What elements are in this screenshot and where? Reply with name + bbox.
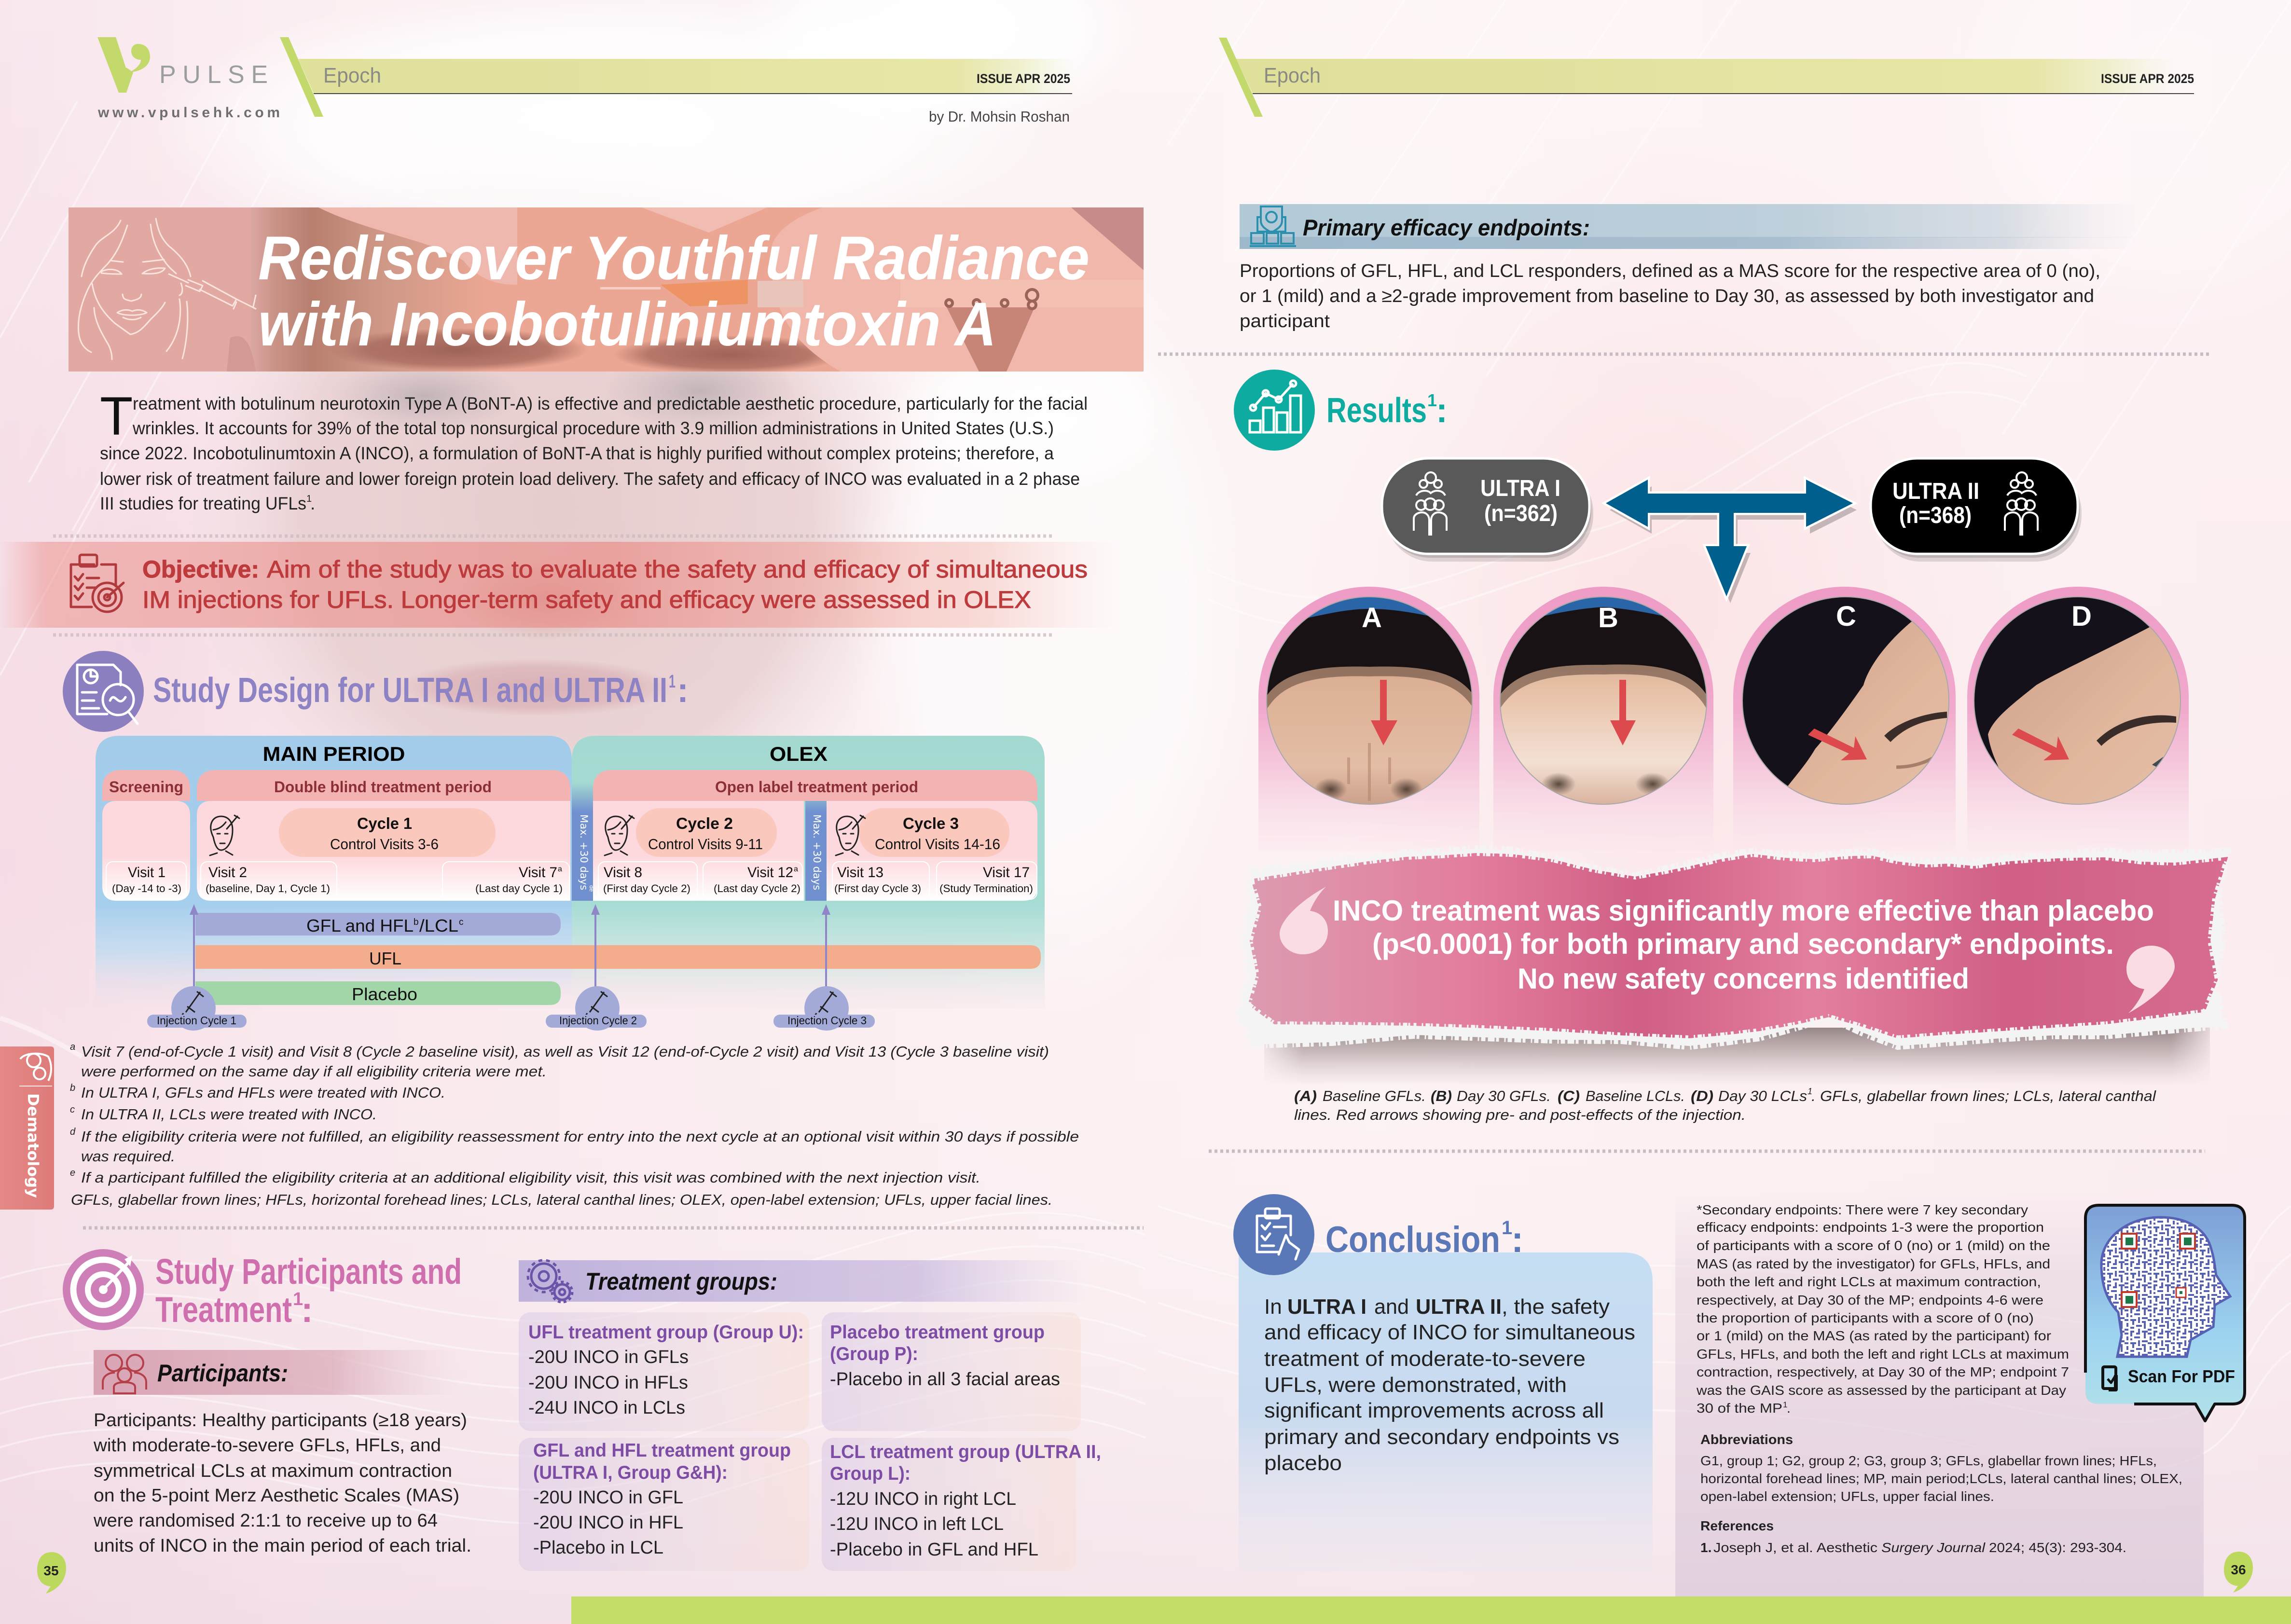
icons: faces with syringe — [605, 815, 865, 855]
title banner — [69, 207, 1144, 374]
author byline: by Dr. Mohsin Roshan — [929, 108, 1070, 125]
text: references — [1700, 1518, 2126, 1555]
header: right page Epoch band: Epoch — [1264, 64, 1321, 87]
icon: target — [73, 1255, 133, 1320]
panel: conclusion: primary and secondary endpoints vs — [1264, 1425, 1619, 1449]
photo panel B — [1493, 587, 1713, 852]
heading: study participants and treatment: 1 — [293, 1289, 303, 1309]
divider dots — [1158, 352, 2209, 356]
photo caption: (C) — [1558, 1087, 1580, 1104]
text: secondary endpoints: MAS (as rated by the investigator) for GFLs, HFLs, and — [1697, 1256, 2050, 1271]
panel: open label treatment period: Control Visits 14-16 — [875, 836, 1000, 853]
bar: GFL and HFL: GFL and HFL — [306, 916, 414, 936]
panel: double blind treatment period: (Last day Cycle 1) — [475, 882, 563, 895]
panel: GFL and HFL treatment group: -Placebo in LCL — [533, 1538, 663, 1558]
panel: open label treatment period: Cycle 3 — [903, 814, 959, 832]
panel: double blind treatment period: (baseline, Day 1, Cycle 1) — [206, 882, 330, 895]
heading: results: Results — [1326, 391, 1427, 430]
panel: double blind treatment period: Visit 2 — [208, 865, 247, 881]
icon: bar chart with trend line — [1250, 381, 1301, 432]
text: participants: Participants: Healthy participants (≥18 years) — [94, 1410, 467, 1431]
page number 36 — [2224, 1552, 2253, 1593]
panel: UFL treatment group: UFL treatment group (Group U): — [528, 1322, 804, 1343]
panel: LCL treatment group: Group L): — [830, 1463, 911, 1484]
badge: ULTRA I — [1382, 458, 1593, 562]
text: abbreviations: G1, group 1; G2, group 2; G3, group 3; GFLs, glabellar frown lines; HFLs, — [1700, 1453, 2157, 1468]
section band: primary efficacy endpoints: Primary efficacy endpoints: — [1303, 215, 1590, 240]
panel: open label treatment period: (First day Cycle 3) — [834, 882, 921, 895]
torn paper: white edge — [1239, 849, 2227, 1046]
bar: GFL and HFL: c — [459, 917, 463, 927]
footnotes: If the eligibility criteria were not fulfilled, an eligibility reassessment for entry into the next cycle at an optional visit within 30 days if possible — [81, 1128, 1079, 1145]
background photo: ghosted face with cap and gloves — [145, 0, 1259, 1023]
divider dots — [1209, 1149, 2205, 1153]
panel: conclusion — [1233, 1194, 1653, 1571]
photo caption: 1 — [1808, 1087, 1812, 1096]
intro paragraph: since 2022. Incobotulinumtoxin A (INCO), a formulation of BoNT-A that is highly purified without complex proteins; therefore, a — [100, 443, 1054, 463]
photo caption: lines. Red arrows showing pre- and post-effects of the injection. — [1294, 1106, 1746, 1123]
footnotes: In ULTRA I, GFLs and HFLs were treated with INCO. — [81, 1084, 445, 1101]
footnotes: d — [70, 1127, 76, 1137]
heading: study participants and treatment: Treatment — [155, 1290, 292, 1330]
text: primary endpoints: Proportions of GFL, HFL, and LCL responders, defined as a MAS score for the respective area of 0 (no), — [1240, 261, 2100, 281]
badge: ULTRA II: (n=368) — [1899, 503, 1972, 528]
marker: injection cycle 1 — [147, 986, 247, 1031]
heading: study participants and treatment: : — [301, 1290, 313, 1330]
header: left page Epoch band — [280, 37, 1076, 117]
text: secondary endpoints: of participants with a score of 0 (no) or 1 (mild) on the — [1697, 1238, 2050, 1253]
panel: GFL and HFL treatment group: GFL and HFL treatment group — [533, 1440, 791, 1461]
panel: UFL treatment group — [519, 1312, 809, 1431]
heading: results: 1 — [1427, 390, 1437, 410]
intro paragraph: . — [310, 494, 315, 513]
panel: open label treatment period: Open label treatment period — [715, 778, 918, 796]
badge: ULTRA I: ULTRA I — [1480, 476, 1560, 501]
heading: study design — [63, 651, 689, 732]
photo caption: Day 30 LCLs — [1718, 1087, 1807, 1104]
panel: conclusion: treatment of moderate-to-severe — [1264, 1347, 1586, 1371]
section band: treatment groups — [519, 1260, 1088, 1302]
callout: torn paper key message: No new safety concerns identified — [1518, 963, 1969, 995]
panel: conclusion: : — [1511, 1219, 1523, 1260]
callout: torn paper key message: INCO treatment was significantly more effective than placebo — [1333, 895, 2154, 927]
page number 36: 36 — [2231, 1562, 2246, 1577]
objective band: Aim of the study was to evaluate the safety and efficacy of simultaneous — [267, 556, 1088, 583]
icon: line face with syringe — [78, 219, 256, 359]
text: secondary endpoints: efficacy endpoints: endpoints 1-3 were the proportion — [1697, 1220, 2044, 1235]
text: secondary endpoints: contraction, respectively, at Day 30 of the MP; endpoint 7 — [1697, 1364, 2069, 1379]
icon: gears — [528, 1260, 572, 1302]
panel: conclusion: , the safety — [1502, 1295, 1610, 1319]
intro paragraph: reatment with botulinum neurotoxin Type A (BoNT-A) is effective and predictable aesthetic procedure, particularly for the facial — [133, 394, 1088, 413]
header: left page Epoch band: ISSUE APR 2025 — [977, 71, 1070, 86]
text: secondary endpoints — [1696, 1202, 2069, 1416]
callout: torn paper key message — [1239, 849, 2227, 1086]
marker: injection cycle 1: Injection Cycle 1 — [157, 1014, 236, 1027]
panel: LCL treatment group: -Placebo in GFL and HFL — [830, 1540, 1038, 1560]
logo: V Pulse: www.vpulsehk.com — [97, 105, 280, 121]
bar: UFL — [195, 945, 1041, 969]
badge: ULTRA II — [1871, 458, 2082, 562]
bar: placebo: Placebo — [352, 984, 417, 1004]
panel: open label treatment period: Visit 12 — [747, 865, 793, 881]
text: secondary endpoints: 30 of the MP — [1697, 1401, 1782, 1416]
text: participants: with moderate-to-severe GFLs, HFLs, and — [93, 1435, 441, 1456]
photo panel D — [1967, 587, 2189, 852]
spacer strips: max +30 days — [572, 783, 827, 901]
text: references: 1. — [1700, 1540, 1711, 1555]
heading: study design: Study Design for ULTRA I and ULTRA II — [153, 671, 667, 710]
chart: study timeline — [96, 736, 1045, 1031]
panel: LCL treatment group — [822, 1438, 1101, 1571]
marker: injection cycle 3 — [773, 986, 875, 1031]
text: secondary endpoints: GFLs, HFLs, and both the left and right LCLs at maximum — [1697, 1347, 2069, 1362]
arrows: injection cycles — [190, 904, 830, 989]
icon: phone — [2103, 1367, 2116, 1390]
panel: GFL and HFL treatment group — [519, 1438, 809, 1571]
panel: screening: Screening — [109, 778, 183, 796]
panel: open label treatment period: (Study Termination) — [939, 882, 1033, 895]
panel: placebo treatment group: Placebo treatment group — [830, 1322, 1045, 1343]
panel: double blind treatment period: Cycle 1 — [357, 814, 412, 832]
icon: face with syringe — [210, 815, 239, 855]
heading: study design: 1 — [669, 672, 676, 692]
photo panel C — [1733, 587, 1956, 852]
objective band — [0, 536, 1119, 635]
objective band: IM injections for UFLs. Longer-term safety and efficacy were assessed in OLEX — [142, 586, 1031, 613]
panel: open label treatment period: Visit 8 — [604, 865, 642, 881]
footnotes: GFLs, glabellar frown lines; HFLs, horizontal forehead lines; LCLs, lateral canthal lines; OLEX, open-label extension; UFLs, upper facial lines. — [71, 1191, 1052, 1208]
footnotes: If a participant fulfilled the eligibility criteria at an additional eligibility visit, this visit was combined with the next injection visit. — [81, 1169, 980, 1186]
torn paper: pink face — [1251, 856, 2224, 1035]
panel: UFL treatment group: -20U INCO in HFLs — [528, 1373, 688, 1393]
text: secondary endpoints: . — [1787, 1401, 1791, 1416]
panel: conclusion: placebo — [1264, 1451, 1342, 1475]
section band: participants: Participants: — [157, 1360, 288, 1387]
panel: screening — [102, 770, 190, 901]
intro paragraph — [100, 386, 1088, 513]
divider dots — [83, 1226, 1144, 1229]
page number 35 — [37, 1552, 66, 1594]
icon: closing quote — [2126, 946, 2175, 1013]
photo caption: Baseline LCLs. — [1586, 1087, 1685, 1104]
bar: GFL and HFL: /LCL — [419, 916, 458, 936]
panel: placebo treatment group: (Group P): — [830, 1344, 918, 1364]
spacer strips: max +30 days: de — [588, 885, 595, 892]
text: references: Joseph J, et al. Aesthetic — [1713, 1540, 1877, 1555]
panel: main period: MAIN PERIOD — [262, 743, 405, 765]
header: left page Epoch band: Epoch — [323, 64, 381, 87]
text: abbreviations — [1700, 1432, 2182, 1504]
text: secondary endpoints: was the GAIS score as assessed by the participant at Day — [1696, 1383, 2066, 1398]
panel: UFL treatment group: -24U INCO in LCLs — [528, 1398, 685, 1418]
panel: open label treatment period: Visit 17 — [983, 865, 1030, 881]
photo caption: (D) — [1691, 1087, 1713, 1104]
text: participants: were randomised 2:1:1 to receive up to 64 — [93, 1511, 438, 1531]
QR speech bubble: Scan For PDF — [2128, 1366, 2235, 1386]
footnotes: b — [70, 1083, 75, 1093]
header: right page Epoch band: ISSUE APR 2025 — [2101, 71, 2194, 86]
photo caption: . GFLs, glabellar frown lines; LCLs, lateral canthal — [1811, 1087, 2156, 1104]
bar: placebo — [195, 981, 561, 1005]
panel: double blind treatment period: a — [558, 865, 562, 873]
panel: open label treatment period: a — [794, 865, 798, 873]
objective band: Objective: — [142, 556, 259, 583]
marker: injection cycle 2 — [546, 986, 647, 1031]
marker: injection cycle 2: Injection Cycle 2 — [559, 1014, 637, 1027]
footnotes: was required. — [81, 1148, 175, 1165]
text: participants: on the 5-point Merz Aesthetic Scales (MAS) — [94, 1486, 459, 1506]
panel: GFL and HFL treatment group: (ULTRA I, Group G&H): — [533, 1462, 728, 1483]
intro paragraph: lower risk of treatment failure and lower foreign protein load delivery. The safety and efficacy of INCO was evaluated in a 2 phase — [100, 469, 1080, 489]
section band: treatment groups: Treatment groups: — [585, 1268, 777, 1295]
bar: GFL and HFL — [195, 913, 561, 936]
icon: checklist and target — [71, 555, 124, 612]
photo caption: Baseline GFLs. — [1323, 1087, 1426, 1104]
arrow: three-way connector — [1606, 480, 1857, 603]
text: secondary endpoints: both the left and right LCLs at maximum contraction, — [1697, 1274, 2041, 1289]
text: secondary endpoints: respectively, at Day 30 of the MP; endpoints 4-6 were — [1697, 1293, 2043, 1307]
photo caption — [1294, 1087, 2156, 1123]
panel: open label treatment period: Cycle 2 — [676, 814, 733, 832]
spacer strips: max +30 days: Max. +30 days — [811, 814, 823, 890]
panel: conclusion: Conclusion — [1325, 1219, 1500, 1260]
bottom green bar — [571, 1596, 2291, 1624]
photo panel D: D — [2071, 601, 2092, 632]
panel: LCL treatment group: LCL treatment group (ULTRA II, — [830, 1442, 1101, 1462]
marker: injection cycle 3: Injection Cycle 3 — [787, 1014, 867, 1027]
panel: conclusion: 1 — [1502, 1217, 1512, 1239]
panel: open label treatment period: Visit 13 — [837, 865, 883, 881]
icon: report with magnifier — [77, 665, 138, 724]
icon: opening quote — [1280, 887, 1328, 954]
panel: conclusion: significant improvements across all — [1264, 1399, 1604, 1422]
badge: ULTRA I: (n=362) — [1484, 501, 1558, 526]
text: secondary endpoints: *Secondary endpoints: There were 7 key secondary — [1697, 1202, 2028, 1217]
section band: primary efficacy endpoints — [1240, 204, 2142, 249]
heading: results — [1234, 370, 1448, 451]
panel: conclusion: In — [1264, 1295, 1282, 1319]
photo caption: (B) — [1431, 1087, 1452, 1104]
footnotes: a — [70, 1042, 75, 1052]
panel: screening: (Day -14 to -3) — [112, 882, 181, 895]
icon: shield over monitors — [1250, 206, 1296, 246]
panel: double blind treatment period: Double blind treatment period — [274, 778, 492, 796]
heading: study participants and treatment — [63, 1249, 462, 1330]
panel: GFL and HFL treatment group: -20U INCO in HFL — [533, 1513, 683, 1533]
panel: references background — [1675, 1192, 2204, 1596]
QR code shaped as head — [2101, 1217, 2230, 1357]
badge: ULTRA II: ULTRA II — [1892, 479, 1979, 504]
text: participants — [93, 1410, 471, 1556]
photo caption: Day 30 GFLs. — [1457, 1087, 1551, 1104]
panel: open label treatment period: (Last day Cycle 2) — [714, 882, 800, 895]
text: abbreviations: Abbreviations — [1700, 1432, 1793, 1447]
callout: torn paper key message: (p<0.0001) for both primary and secondary* endpoints. — [1372, 928, 2114, 960]
panel: placebo treatment group — [822, 1312, 1081, 1431]
title banner: with Incobotuliniumtoxin A — [258, 290, 996, 359]
text: secondary endpoints: or 1 (mild) on the MAS (as rated by the participant) for — [1697, 1328, 2051, 1343]
header: right page Epoch band — [1219, 38, 2194, 117]
logo: V Pulse: PULSE — [159, 61, 268, 89]
text: primary endpoints: or 1 (mild) and a ≥2-grade improvement from baseline to Day 30, as assessed by both investigator and — [1240, 286, 2094, 306]
page number 35: 35 — [43, 1563, 59, 1578]
panel: double blind treatment period: Visit 7 — [519, 865, 557, 881]
bar: UFL: UFL — [369, 949, 401, 968]
panel: open label treatment period: Control Visits 9-11 — [648, 836, 763, 853]
title banner: Rediscover Youthful Radiance — [258, 224, 1090, 293]
text: abbreviations: open-label extension; UFLs, upper facial lines. — [1700, 1489, 1994, 1504]
footnotes — [70, 1042, 1079, 1208]
footnotes: In ULTRA II, LCLs were treated with INCO. — [81, 1106, 377, 1123]
photo panel C: C — [1836, 601, 1856, 632]
panel: conclusion: and efficacy of INCO for simultaneous — [1264, 1321, 1635, 1344]
footnotes: were performed on the same day if all eligibility criteria were met. — [81, 1063, 547, 1080]
heading: results: : — [1436, 391, 1448, 430]
photo panel B: B — [1598, 602, 1618, 633]
text: abbreviations: horizontal forehead lines; MP, main period;LCLs, lateral canthal lines; OLEX, — [1700, 1471, 2182, 1486]
text: secondary endpoints: 1 — [1783, 1400, 1787, 1409]
footnotes: Visit 7 (end-of-Cycle 1 visit) and Visit 8 (Cycle 2 baseline visit), as well as Visit 12 (end-of-Cycle 2 visit) and Visit 13 (Cycle 3 baseline visit) — [81, 1043, 1049, 1060]
photo panel A: A — [1362, 602, 1382, 633]
intro paragraph: 1 — [306, 494, 312, 504]
icon: people — [2005, 472, 2038, 536]
panel: LCL treatment group: -12U INCO in left LCL — [830, 1514, 1004, 1534]
section band: participants — [94, 1350, 460, 1395]
heading: study design: : — [677, 671, 689, 710]
intro paragraph: T — [100, 386, 133, 446]
text: secondary endpoints: the proportion of participants with a score of 0 (no) — [1697, 1310, 2034, 1325]
spacer strips: max +30 days: Max. +30 days — [578, 814, 590, 890]
side tab: Dematology — [0, 1046, 54, 1210]
side tab: Dematology: Dematology — [24, 1093, 41, 1198]
intro paragraph: III studies for treating UFLs — [100, 494, 306, 513]
panel: double blind treatment period: Control Visits 3-6 — [330, 836, 439, 853]
panel: screening: Visit 1 — [128, 865, 166, 881]
text: primary endpoints: participant — [1240, 311, 1330, 331]
panel: OLEX: OLEX — [770, 743, 828, 765]
panel: placebo treatment group: -Placebo in all 3 facial areas — [830, 1369, 1060, 1390]
QR speech bubble — [2085, 1205, 2245, 1421]
icon: hand and gears — [20, 1054, 51, 1081]
panel: double blind treatment period — [197, 770, 570, 901]
panel: open label treatment period — [593, 770, 1037, 901]
text: participants: symmetrical LCLs at maximum contraction — [94, 1461, 452, 1481]
text: references: References — [1700, 1518, 1774, 1533]
footnotes: e — [70, 1168, 75, 1178]
heading: study participants and treatment: Study Participants and — [155, 1252, 462, 1292]
panel: open label treatment period: (First day Cycle 2) — [603, 882, 690, 895]
photo caption: (A) — [1294, 1087, 1317, 1104]
footnotes: c — [70, 1104, 75, 1115]
panel: OLEX — [572, 736, 1045, 1008]
panel: conclusion: and — [1374, 1295, 1409, 1319]
icon: group of people — [103, 1355, 146, 1393]
panel: conclusion: ULTRA I — [1287, 1295, 1366, 1319]
bar: GFL and HFL: b — [414, 917, 419, 927]
panel: UFL treatment group: -20U INCO in GFLs — [528, 1347, 689, 1367]
text: primary endpoints — [1240, 261, 2100, 331]
photo panel A — [1258, 587, 1479, 852]
panel: conclusion: ULTRA II — [1416, 1295, 1502, 1319]
icon: people — [1414, 472, 1447, 536]
panel: conclusion: UFLs, were demonstrated, with — [1264, 1373, 1567, 1397]
panel: LCL treatment group: -12U INCO in right LCL — [830, 1489, 1016, 1509]
text: references: Surgery Journal — [1881, 1540, 1986, 1555]
icon: checklist with hand — [1257, 1209, 1299, 1259]
text: references: 2024; 45(3): 293-304. — [1989, 1540, 2126, 1555]
logo: V Pulse — [97, 37, 280, 121]
panel: GFL and HFL treatment group: -20U INCO in GFL — [533, 1487, 683, 1508]
text: participants: units of INCO in the main period of each trial. — [94, 1536, 471, 1556]
panel: main period — [96, 736, 572, 1008]
intro paragraph: wrinkles. It accounts for 39% of the total top nonsurgical procedure with 3.9 million administrations in United States (U.S.) — [132, 418, 1054, 438]
